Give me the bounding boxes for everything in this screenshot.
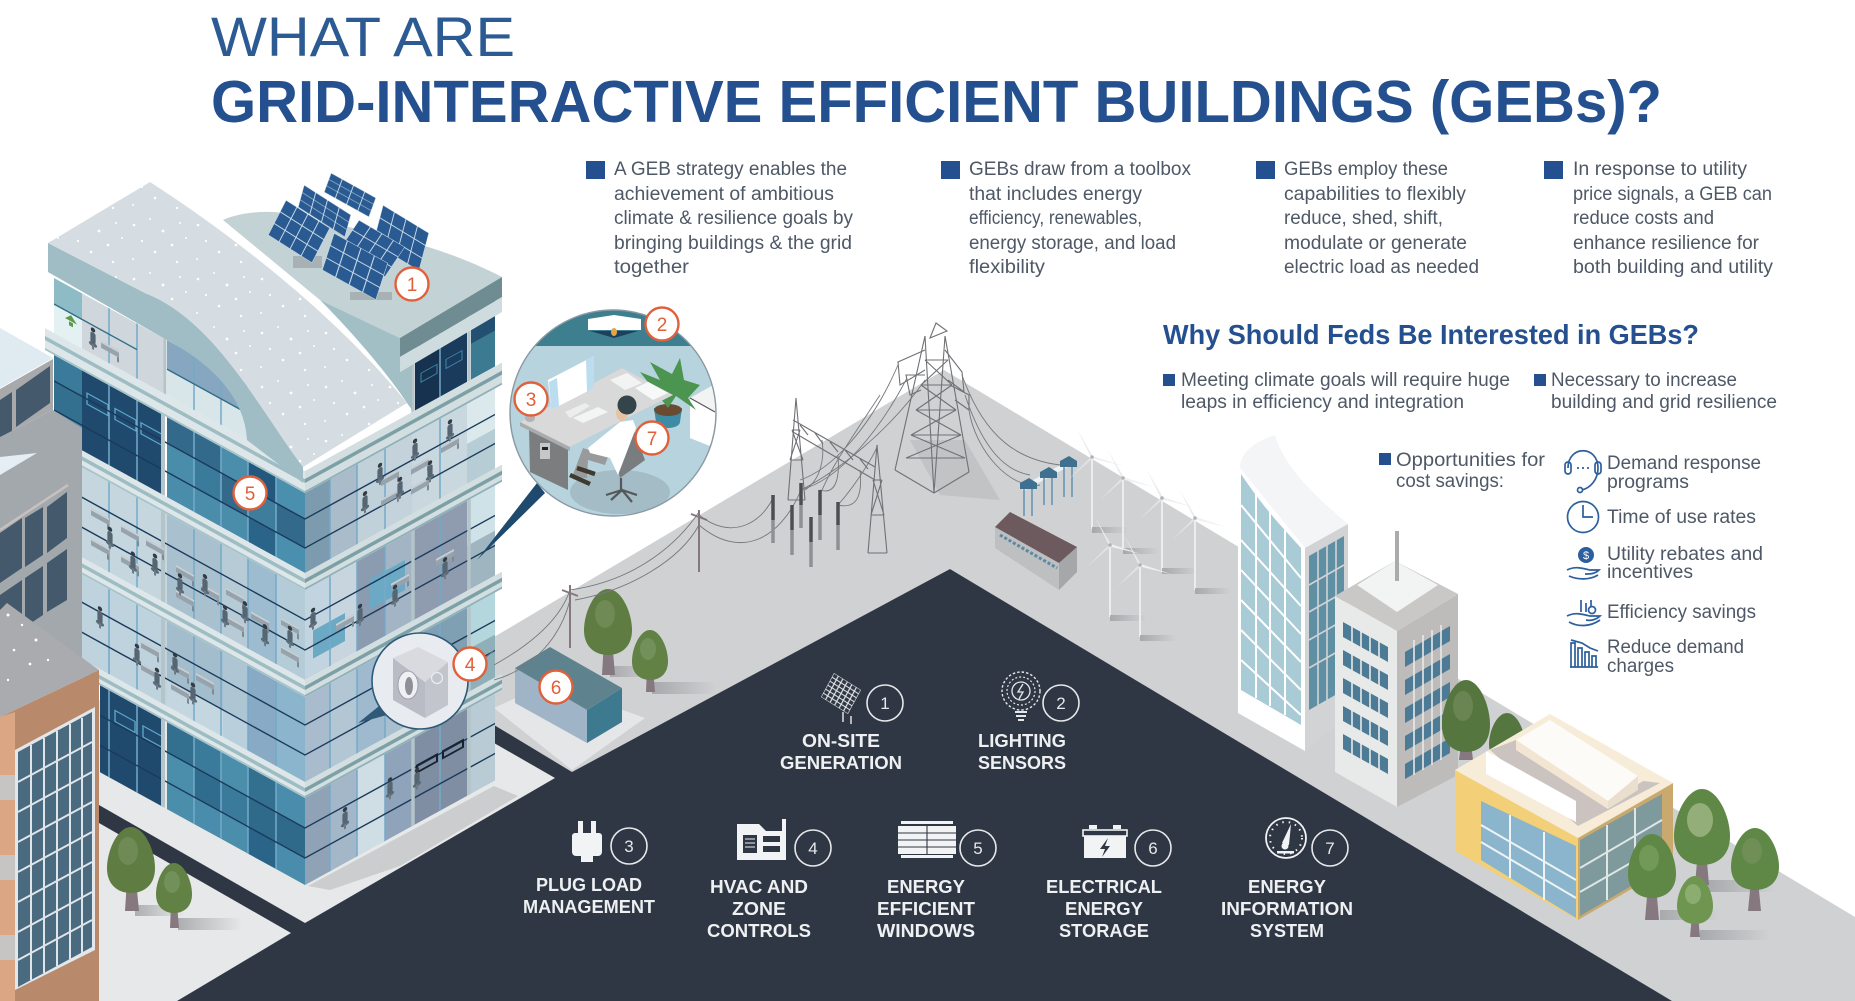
utility poles and wires bbox=[470, 380, 925, 680]
marker 2 bbox=[646, 308, 678, 340]
intro column 1: climate & resilience goals by bbox=[614, 208, 853, 229]
building plaza bbox=[99, 700, 555, 923]
intro column 1: achievement of ambitious bbox=[614, 184, 834, 205]
icon: clock bbox=[1568, 502, 1598, 532]
item: lighting sensors: LIGHTING bbox=[978, 731, 1066, 751]
marker 5 bbox=[234, 476, 266, 510]
marker 2: 2 bbox=[657, 315, 667, 336]
intro column 2: flexibility bbox=[969, 257, 1046, 278]
intro column 4: enhance resilience for bbox=[1573, 233, 1760, 254]
intro column 2 bbox=[941, 159, 1191, 278]
trees bbox=[107, 589, 717, 930]
title bbox=[211, 5, 1662, 135]
battery pad bbox=[494, 683, 645, 770]
savings: demand response: Demand response bbox=[1607, 453, 1761, 474]
item: lighting sensors: 2 bbox=[1056, 694, 1066, 713]
intro column 3: capabilities to flexibly bbox=[1284, 184, 1467, 205]
item: windows: WINDOWS bbox=[877, 921, 975, 941]
icon: plug bbox=[572, 821, 602, 862]
intro column 1 bbox=[586, 159, 853, 278]
intro column 2: that includes energy bbox=[969, 184, 1142, 205]
bullet: resilience bbox=[1534, 370, 1777, 413]
item: plug load management bbox=[523, 821, 655, 917]
item: electrical storage: ENERGY bbox=[1065, 899, 1143, 919]
callout pointer bbox=[477, 483, 545, 560]
savings: rebates bbox=[1567, 544, 1763, 583]
orange number markers bbox=[234, 268, 678, 704]
right faces bbox=[305, 297, 502, 885]
left faces bbox=[45, 328, 305, 885]
item: windows: EFFICIENT bbox=[877, 899, 975, 919]
wind turbines bbox=[1069, 429, 1231, 641]
savings: demand charges bbox=[1570, 637, 1744, 677]
intro column 2: GEBs draw from a toolbox bbox=[969, 159, 1191, 180]
intro column 2: efficiency, renewables, bbox=[969, 208, 1142, 229]
item: electrical storage: 6 bbox=[1148, 839, 1158, 858]
intro column 4 bbox=[1544, 159, 1774, 278]
item: electrical storage bbox=[1046, 825, 1171, 941]
savings: time of use bbox=[1568, 502, 1756, 532]
savings: rebates: Utility rebates and bbox=[1607, 544, 1763, 565]
magnified office callout bbox=[477, 305, 725, 560]
marker 5: 5 bbox=[245, 484, 255, 505]
marker 6: 6 bbox=[551, 678, 561, 699]
intro column 1: together bbox=[614, 257, 690, 278]
item: electrical storage: STORAGE bbox=[1059, 921, 1149, 941]
lower-left plaza bbox=[99, 823, 291, 1001]
item: on-site generation: ON-SITE bbox=[802, 731, 880, 751]
icon: hand with coin: $ bbox=[1583, 550, 1589, 562]
marker 1 bbox=[396, 268, 428, 300]
bullet: resilience: Necessary to increase bbox=[1551, 370, 1737, 391]
item: electrical storage: ELECTRICAL bbox=[1046, 877, 1162, 897]
heading: why feds: Why Should Feds Be Interested in GEBs? bbox=[1163, 319, 1699, 350]
savings: demand charges: Reduce demand bbox=[1607, 637, 1744, 658]
item: hvac: ZONE bbox=[732, 899, 786, 919]
savings: rebates: incentives bbox=[1607, 562, 1693, 583]
item: plug load management: PLUG LOAD bbox=[536, 875, 642, 895]
bullet: resilience: building and grid resilience bbox=[1551, 392, 1777, 413]
icon: hand with coin bbox=[1567, 547, 1599, 579]
penthouse glass bbox=[54, 278, 247, 439]
office workers right bbox=[309, 415, 459, 849]
item: hvac: HVAC AND bbox=[710, 877, 808, 897]
battery storage box bbox=[515, 647, 622, 743]
flat roof edge bbox=[400, 277, 502, 357]
intro column 2: energy storage, and load bbox=[969, 233, 1176, 254]
solar array bbox=[268, 173, 429, 300]
bullet: opportunities bbox=[1379, 450, 1546, 492]
item: lighting sensors bbox=[978, 672, 1079, 773]
marker 1: 1 bbox=[407, 275, 417, 296]
icon: falling bar chart bbox=[1570, 640, 1598, 667]
flat roof bbox=[223, 212, 502, 338]
icon: gauge bbox=[1266, 818, 1306, 858]
item: plug load management: MANAGEMENT bbox=[523, 897, 655, 917]
curved fascia bbox=[320, 300, 412, 410]
item: information system: 7 bbox=[1325, 839, 1335, 858]
building shadow bbox=[308, 786, 518, 890]
item: lighting sensors: SENSORS bbox=[978, 753, 1066, 773]
icon: battery bbox=[1083, 825, 1127, 858]
title: GRID-INTERACTIVE EFFICIENT BUILDINGS (GEBs)? bbox=[211, 69, 1662, 135]
substation and factory bbox=[995, 456, 1077, 590]
ground bbox=[494, 370, 1855, 1001]
item: windows: ENERGY bbox=[887, 877, 965, 897]
savings: demand response: programs bbox=[1607, 472, 1689, 493]
intro column 4: In response to utility bbox=[1573, 159, 1748, 180]
lower roof fascia bbox=[48, 243, 303, 483]
intro column 4: both building and utility bbox=[1573, 257, 1774, 278]
trees behind low building bbox=[1442, 680, 1525, 763]
bullet: opportunities: cost savings: bbox=[1396, 471, 1504, 492]
marker 7: 7 bbox=[647, 429, 657, 450]
intro column 1: A GEB strategy enables the bbox=[614, 159, 847, 180]
intro column 4: price signals, a GEB can bbox=[1573, 184, 1772, 205]
item: information system: SYSTEM bbox=[1250, 921, 1324, 941]
upper slab bbox=[400, 297, 502, 372]
item: on-site generation: GENERATION bbox=[780, 753, 902, 773]
gantry structure bbox=[788, 398, 887, 553]
item: on-site generation: 1 bbox=[880, 694, 890, 713]
savings: time of use: Time of use rates bbox=[1607, 507, 1756, 528]
item: information system bbox=[1221, 818, 1353, 941]
transmission tower bbox=[800, 323, 1060, 500]
item: windows bbox=[877, 821, 996, 941]
grey office tower bbox=[1335, 531, 1458, 807]
bullet: climate goals: leaps in efficiency and integration bbox=[1181, 392, 1464, 413]
intro column 1: bringing buildings & the grid bbox=[614, 233, 852, 254]
intro column 3: electric load as needed bbox=[1284, 257, 1479, 278]
item: windows: 5 bbox=[973, 839, 983, 858]
magnified HVAC callout bbox=[358, 633, 468, 729]
dark panel base bbox=[99, 569, 1672, 1001]
icon: HVAC unit bbox=[737, 819, 786, 860]
yellow low building bbox=[1455, 714, 1673, 920]
item: hvac: 4 bbox=[808, 839, 818, 858]
item: on-site generation bbox=[780, 673, 903, 773]
marker 6 bbox=[540, 670, 572, 704]
insulators bbox=[773, 483, 838, 567]
item: hvac bbox=[707, 819, 831, 941]
savings: efficiency: Efficiency savings bbox=[1607, 602, 1756, 623]
marker 3: 3 bbox=[526, 390, 536, 411]
marker 4 bbox=[454, 648, 486, 680]
icon: solar panel bbox=[821, 673, 861, 724]
item: information system: INFORMATION bbox=[1221, 899, 1353, 919]
savings: efficiency bbox=[1567, 600, 1756, 626]
item: plug load management: 3 bbox=[624, 837, 634, 856]
bullet: climate goals bbox=[1163, 370, 1510, 413]
item: hvac: CONTROLS bbox=[707, 921, 811, 941]
office workers left bbox=[91, 508, 299, 768]
icon: headset bbox=[1565, 451, 1601, 492]
marker 4: 4 bbox=[465, 655, 476, 676]
curved speckled roof bbox=[48, 182, 407, 467]
icon: sensor bulb bbox=[1002, 672, 1040, 720]
savings: demand charges: charges bbox=[1607, 656, 1674, 677]
bullet: opportunities: Opportunities for bbox=[1396, 450, 1546, 471]
icon: window panels bbox=[898, 821, 956, 858]
tree cluster bbox=[1628, 789, 1779, 940]
marker 7 bbox=[636, 422, 668, 454]
neighbouring grey building bbox=[0, 328, 82, 660]
intro column 3: modulate or generate bbox=[1284, 233, 1467, 254]
intro column 3: GEBs employ these bbox=[1284, 159, 1448, 180]
main building bbox=[45, 173, 502, 885]
item: information system: ENERGY bbox=[1248, 877, 1326, 897]
bullet: climate goals: Meeting climate goals will require huge bbox=[1181, 370, 1510, 391]
title: WHAT ARE bbox=[211, 5, 515, 68]
marker 3 bbox=[514, 382, 548, 416]
icon: hand with gears bbox=[1567, 600, 1600, 626]
intro column 3: reduce, shed, shift, bbox=[1284, 208, 1443, 229]
intro column 3 bbox=[1256, 159, 1479, 278]
glass tower bbox=[1238, 435, 1348, 751]
savings: demand response bbox=[1565, 451, 1761, 493]
intro column 4: reduce costs and bbox=[1573, 208, 1714, 229]
brick building bbox=[0, 603, 99, 1001]
